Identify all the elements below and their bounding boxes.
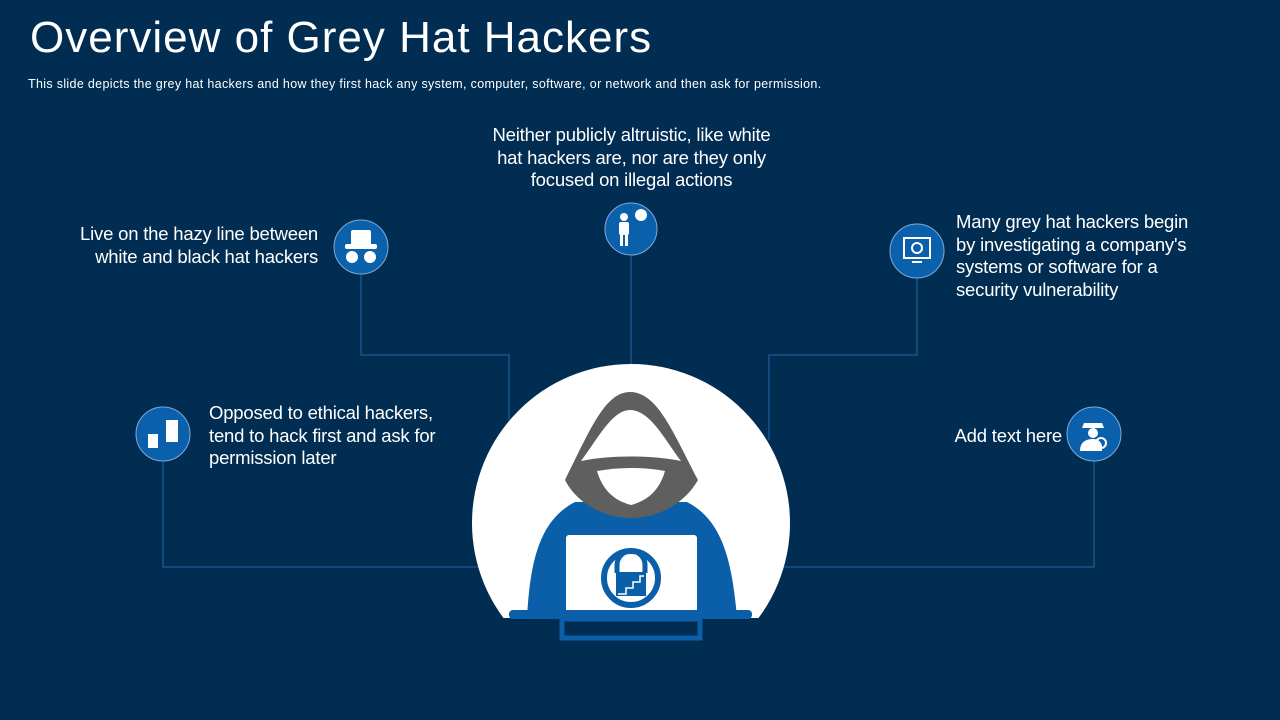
text: neither altruistic: focused on illegal actions: [531, 169, 732, 190]
text: opposed: [209, 402, 436, 468]
icon: person with gear: [619, 209, 647, 246]
icon: hat and glasses: [345, 230, 377, 263]
icon: detective: [1080, 423, 1106, 451]
text: neither altruistic: Neither publicly altruistic, like white: [492, 124, 771, 145]
text: investigating: Many grey hat hackers begin: [956, 211, 1188, 232]
icon: monitor: [904, 238, 930, 262]
text: opposed: Opposed to ethical hackers,: [209, 402, 433, 423]
text: hazy line: white and black hat hackers: [95, 246, 318, 266]
icon circles: [136, 203, 1121, 461]
text: investigating: by investigating a company's: [956, 234, 1186, 254]
text: opposed: permission later: [209, 447, 336, 468]
text: investigating: systems or software for a: [956, 256, 1158, 277]
text: add text: Add text here: [955, 425, 1062, 446]
text: opposed: tend to hack first and ask for: [209, 424, 435, 446]
subtitle: This slide depicts the grey hat hackers and how they first hack any system, computer, software, or network and then ask for permission.: [28, 77, 822, 91]
diagram: [136, 202, 1122, 640]
text: investigating: [956, 211, 1188, 300]
central hacker illustration: [472, 364, 790, 640]
title: Overview of Grey Hat Hackers: [30, 13, 652, 62]
text: investigating: security vulnerability: [956, 278, 1118, 300]
text: neither altruistic: [492, 124, 771, 190]
icon: documents: [148, 420, 178, 448]
text: hazy line: Live on the hazy line between: [80, 223, 318, 244]
text: hazy line: [80, 223, 318, 266]
text: neither altruistic: hat hackers are, nor are they only: [497, 146, 766, 168]
